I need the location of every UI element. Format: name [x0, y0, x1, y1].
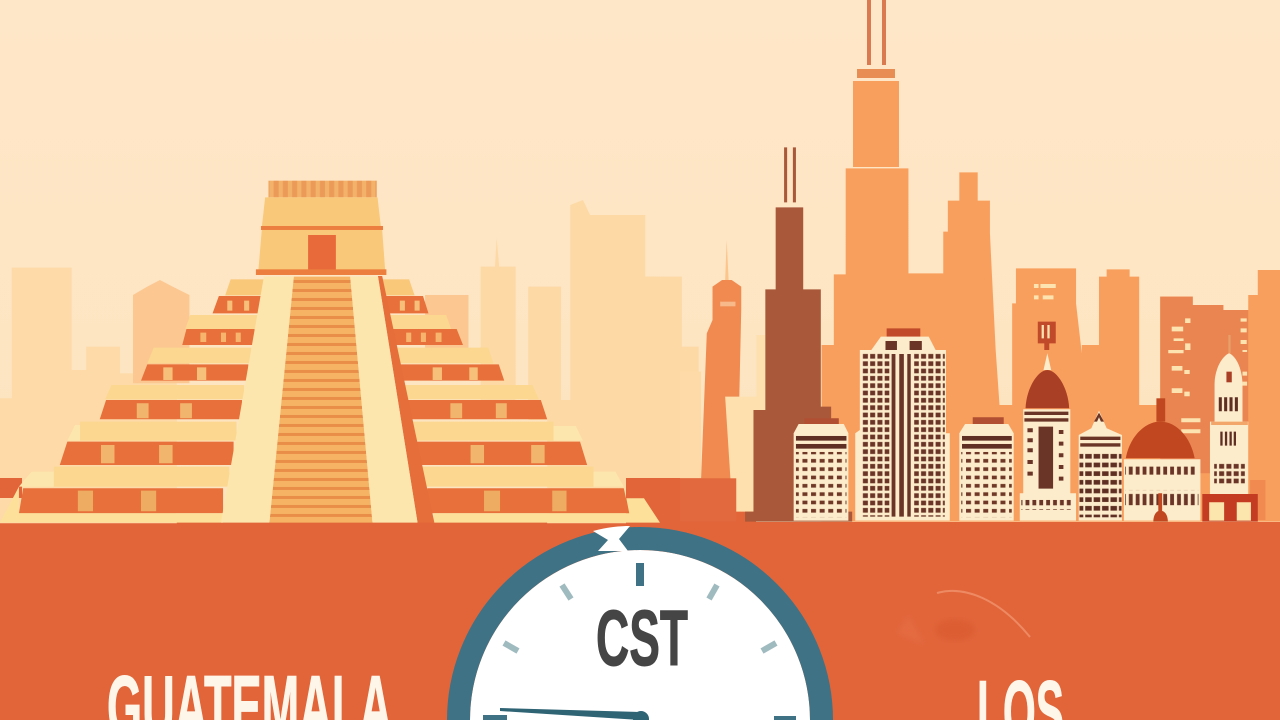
faint mark on ground: [897, 591, 1030, 645]
clock ring: [458, 538, 822, 720]
cream building 1: [794, 418, 848, 521]
temple lower wall: [258, 230, 385, 270]
bell tower 7: [1202, 335, 1265, 522]
ground band: [0, 522, 1280, 720]
clock hand: [500, 708, 649, 720]
cream tower 2: [855, 328, 950, 521]
major ticks 9 and 3: [483, 715, 796, 720]
clock face: [470, 550, 810, 720]
minor ticks: [504, 585, 776, 651]
large pale block: [547, 200, 660, 523]
clock label CST: CST: [596, 593, 688, 682]
right side shadow strip: [378, 276, 434, 523]
domed tower 4: [1020, 322, 1076, 521]
temple upper wall: [262, 197, 381, 227]
darker orange building with lit windows: [1160, 297, 1248, 473]
central staircase: [269, 277, 372, 523]
pale skyline behind the pyramid: [0, 200, 699, 523]
major tick 12: [636, 563, 644, 586]
red base of slim tower: [680, 478, 736, 522]
cream building 5: [1079, 411, 1122, 521]
right tiers: [381, 279, 660, 523]
pale slim tower: [528, 287, 561, 420]
peach building right: [425, 295, 468, 352]
ring crack: [593, 526, 630, 551]
pale tower with spire: [481, 238, 516, 403]
Chicago style skyline: [680, 147, 1280, 522]
ground blocks at horizon: [0, 478, 756, 524]
lit windows on mid tower: [1034, 284, 1056, 299]
main orange skyline mass: [822, 168, 1280, 522]
left tiers: [0, 279, 264, 523]
temple crown: [269, 181, 377, 197]
peach building left: [133, 280, 189, 383]
slim tapered tower: [701, 240, 741, 480]
brown tower: [745, 147, 852, 522]
background sky: [0, 0, 1280, 530]
temple slab: [256, 269, 386, 275]
domed capitol 6: [1124, 398, 1200, 522]
right balustrade: [350, 277, 418, 523]
temple door: [308, 235, 336, 273]
left balustrade: [221, 277, 294, 523]
antenna cap: [857, 69, 895, 78]
pale blocks behind towers: [680, 372, 701, 478]
Mesoamerican pyramid: [0, 181, 660, 523]
pale right blocks: [644, 277, 699, 503]
clock: [458, 526, 822, 720]
top tower of skyline: [853, 0, 899, 167]
cream building 3: [959, 417, 1014, 521]
temple stripe: [261, 226, 383, 230]
twin antenna: [867, 0, 886, 65]
upper shaft: [853, 81, 899, 167]
